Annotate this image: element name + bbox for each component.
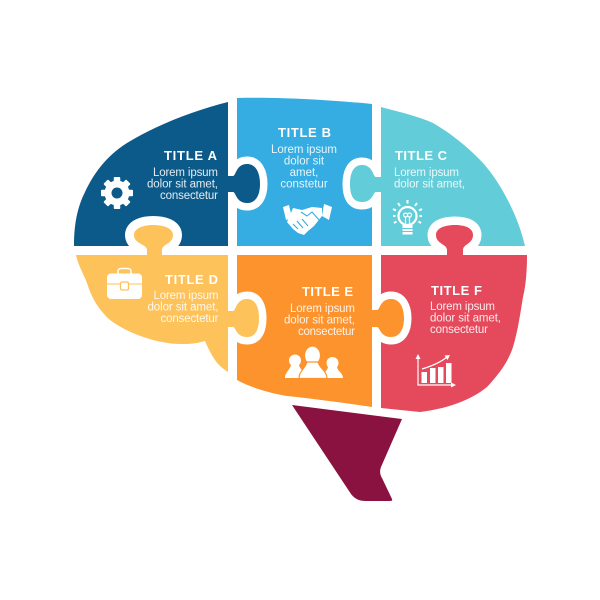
puzzle tab: E into F <box>370 299 404 337</box>
text block: title D body: Lorem ipsum <box>154 290 218 302</box>
text block: title F body: dolor sit amet, <box>430 312 501 324</box>
puzzle tab: C into B <box>350 165 383 202</box>
panel: title C <box>350 107 525 246</box>
text block: title B body: dolor sit <box>284 156 325 168</box>
text block: title F body <box>430 301 501 336</box>
panel: title A <box>74 102 260 246</box>
text block: title E body: consectetur <box>298 326 355 338</box>
text block: title A body: dolor sit amet, <box>147 178 218 190</box>
puzzle tab: F into C <box>436 225 473 257</box>
panel: title E <box>237 255 404 407</box>
text block: title C body: Lorem ipsum <box>394 167 459 179</box>
text block: title D body <box>148 290 219 325</box>
heading: title E: TITLE E <box>302 284 353 299</box>
text block: title C body: dolor sit amet, <box>394 178 465 190</box>
icon: briefcase <box>107 268 142 299</box>
icon: light bulb <box>393 200 422 234</box>
panel: title D <box>76 225 259 372</box>
icon: people <box>285 346 343 378</box>
text block: title D body: dolor sit amet, <box>148 302 218 314</box>
text block: title E body: Lorem ipsum <box>290 303 355 315</box>
text block: title B body: constetur <box>280 178 328 190</box>
text block: title E body <box>284 303 355 338</box>
icon: gear <box>101 177 133 209</box>
text block: title A body <box>147 167 218 202</box>
heading: title F: TITLE F <box>431 283 482 298</box>
text block: title D body: consectetur <box>160 313 219 325</box>
icon: handshake <box>283 204 332 235</box>
text block: title B body: amet, <box>290 167 318 179</box>
panel: title B <box>237 98 372 246</box>
icon: bar chart <box>416 354 456 388</box>
heading: title C: TITLE C <box>395 148 448 163</box>
text block: title A body: Lorem ipsum <box>153 167 218 179</box>
text block: title B body: Lorem ipsum <box>271 144 337 156</box>
text block: title A body: consectetur <box>160 190 218 202</box>
text block: title B body <box>271 144 337 190</box>
panel: title F <box>381 225 527 412</box>
puzzle tab: A into B <box>226 164 260 203</box>
puzzle tab: D into A <box>134 225 173 257</box>
heading: title A: TITLE A <box>164 148 218 163</box>
heading: title D: TITLE D <box>165 272 218 287</box>
text block: title E body: dolor sit amet, <box>284 314 355 326</box>
text block: title C body <box>394 167 465 190</box>
brain stem <box>292 405 402 501</box>
text block: title F body: consectetur <box>430 324 488 336</box>
text block: title F body: Lorem ipsum <box>430 301 495 313</box>
puzzle tab: D into E <box>226 299 259 337</box>
heading: title B: TITLE B <box>278 125 331 140</box>
